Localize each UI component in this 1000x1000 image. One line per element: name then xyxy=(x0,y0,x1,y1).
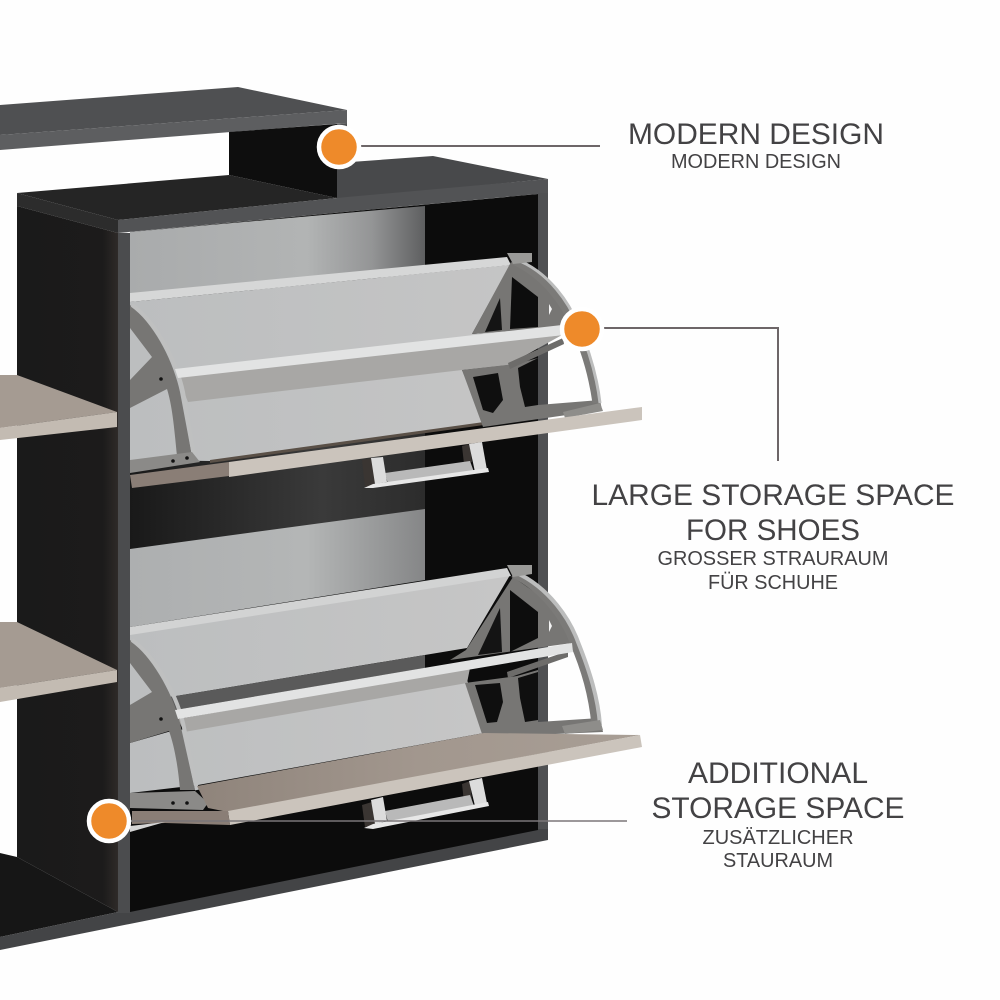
heading: ADDITIONAL xyxy=(688,757,868,790)
left arm xyxy=(130,305,200,473)
floor and base xyxy=(0,827,548,950)
interior gap glow xyxy=(130,430,425,552)
beige shelf lower xyxy=(0,622,117,702)
door shadow line xyxy=(210,422,484,463)
back panel lower xyxy=(130,509,425,627)
flap door xyxy=(130,407,642,488)
subheading second line: FÜR SCHUHE xyxy=(708,572,838,594)
shoe flap lower xyxy=(130,565,642,832)
flap panel xyxy=(130,575,510,705)
flap shadow band xyxy=(178,668,470,732)
right arm xyxy=(462,253,603,427)
front strips xyxy=(118,193,548,913)
right arm xyxy=(450,565,603,737)
upper shelf xyxy=(0,87,347,150)
flap bar xyxy=(175,643,573,719)
subheading: ZUSÄTZLICHER xyxy=(702,827,854,849)
subheading: GROSSER STRAURAUM xyxy=(658,548,888,570)
cabinet interior xyxy=(130,194,538,912)
cabinet top xyxy=(17,156,548,233)
callout: modern design xyxy=(319,118,884,173)
flap panel xyxy=(130,265,564,461)
subheading second line: STAURAUM xyxy=(723,850,833,872)
callout: large storage xyxy=(562,309,954,594)
heading: LARGE STORAGE SPACE xyxy=(592,479,954,512)
flap door xyxy=(130,733,642,832)
dark strip xyxy=(170,655,425,710)
flap handle xyxy=(362,778,489,829)
orange marker xyxy=(562,309,602,349)
flap bar xyxy=(175,325,564,378)
shoe flap upper xyxy=(130,253,642,488)
cabinet side panel xyxy=(17,206,118,912)
left arm xyxy=(130,640,208,810)
callout: additional storage xyxy=(89,757,904,872)
back panel upper xyxy=(130,206,425,296)
flap top band xyxy=(130,257,511,302)
orange marker xyxy=(89,801,129,841)
heading second line: STORAGE SPACE xyxy=(652,792,904,825)
heading second line: FOR SHOES xyxy=(686,514,860,547)
beige shelf upper xyxy=(0,375,117,440)
leader line xyxy=(129,820,627,822)
lower flap panel xyxy=(130,680,484,793)
flap handle xyxy=(362,442,489,488)
leader line xyxy=(602,328,778,461)
flap shadow band xyxy=(178,335,562,402)
riser block xyxy=(229,123,347,198)
cabinet illustration xyxy=(0,87,642,950)
heading: MODERN DESIGN xyxy=(628,118,884,151)
orange marker xyxy=(319,127,359,167)
subheading: MODERN DESIGN xyxy=(671,151,841,173)
flap top band xyxy=(130,568,511,635)
leader line xyxy=(359,145,600,147)
